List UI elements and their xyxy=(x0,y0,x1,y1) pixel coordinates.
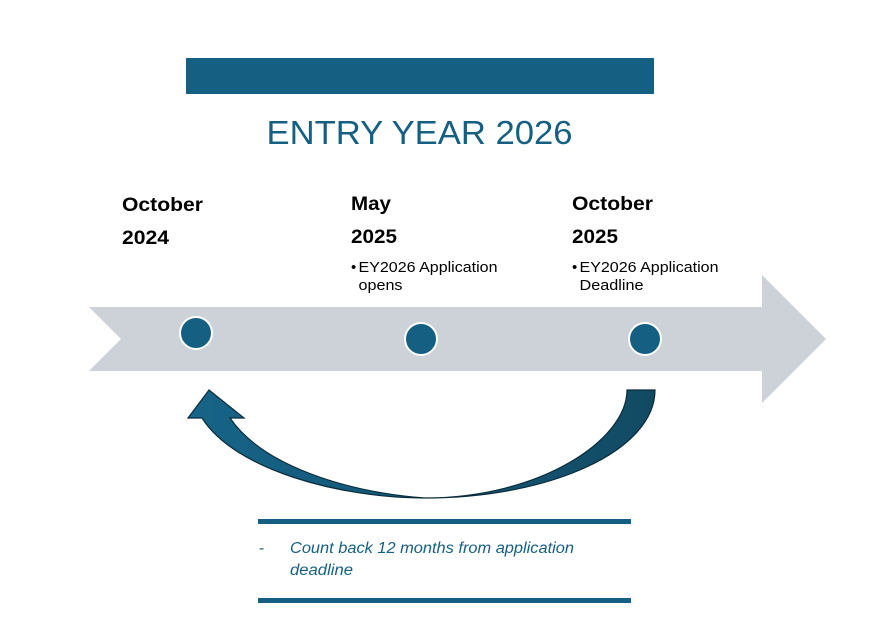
curved arrow: count back xyxy=(188,390,655,498)
milestone: October 2025: EY2026 Application xyxy=(580,260,718,276)
callout text: - xyxy=(259,540,264,557)
milestone: October 2024: 2024 xyxy=(122,227,169,249)
callout: bottom rule xyxy=(258,598,631,603)
callout text xyxy=(259,540,574,579)
timeline arrow xyxy=(89,275,826,403)
title bar xyxy=(186,58,654,94)
milestone: May 2025: 2025 xyxy=(351,226,397,248)
milestone: October 2025 xyxy=(572,193,718,355)
milestone: October 2025: October xyxy=(572,193,653,215)
milestone: October 2024 xyxy=(122,194,212,349)
milestone: May 2025: • xyxy=(351,259,356,276)
milestone: May 2025 xyxy=(351,193,498,355)
milestone: October 2025: • xyxy=(572,259,577,276)
milestone: October 2024: October xyxy=(122,194,203,216)
callout text: deadline xyxy=(290,562,353,579)
milestone: October 2025: 2025 xyxy=(572,226,618,248)
milestone: October 2025: Deadline xyxy=(580,278,644,294)
milestone: May 2025: May xyxy=(351,193,391,215)
callout text: Count back 12 months from application xyxy=(290,540,574,557)
title: ENTRY YEAR 2026 xyxy=(266,115,572,152)
milestone: May 2025: EY2026 Application xyxy=(358,260,498,276)
milestone: May 2025: opens xyxy=(358,278,402,294)
callout: top rule xyxy=(258,519,631,524)
